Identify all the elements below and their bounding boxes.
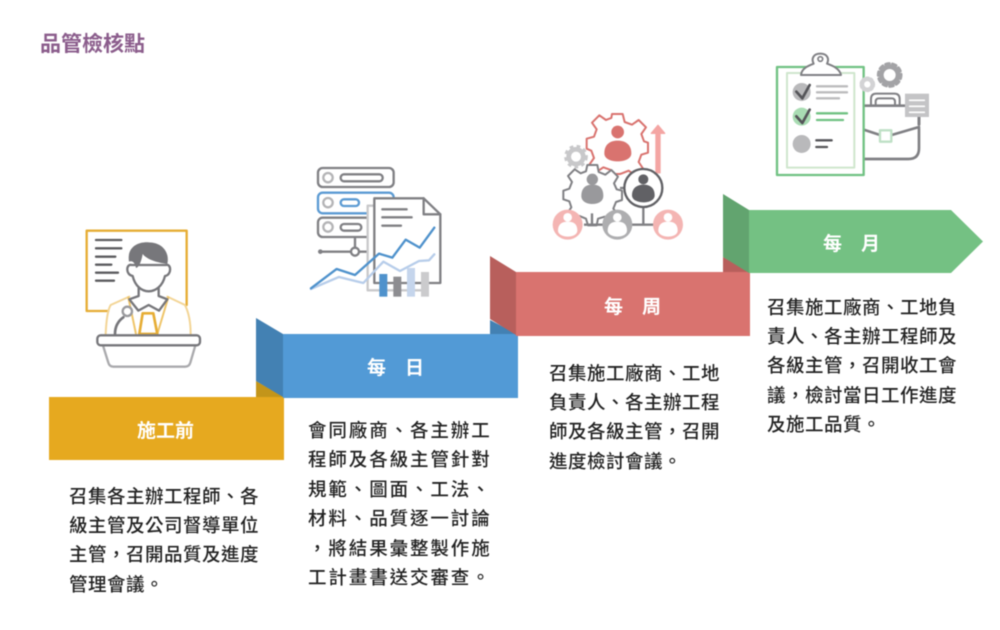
text: 每日 description	[308, 420, 492, 588]
text: 每月 description: 及施工品質。	[767, 414, 881, 435]
text: 每周 description: 師及各級主管，召開	[549, 421, 720, 442]
text: 每日 description: ，將結果彙整製作施	[308, 538, 492, 559]
label: 施工前: 施工前	[137, 421, 194, 442]
ribbon: 施工前	[49, 381, 284, 460]
text: 每月 description: 各級主管，召開收工會	[767, 355, 957, 376]
text: 每周 description: 召集施工廠商、工地	[549, 363, 720, 384]
text: 每日 description: 材料、品質逐一討論	[308, 508, 492, 529]
text: 每日 description: 程師及各級主管針對	[308, 449, 492, 470]
text: 施工前 description	[69, 486, 259, 595]
text: 每日 description: 會同廠商、各主辦工	[308, 420, 492, 441]
text: 每月 description: 責人、各主辦工程師及	[767, 326, 957, 347]
text: 每周 description: 進度檢討會議。	[549, 451, 682, 472]
ribbon: 每月	[723, 194, 983, 273]
text: 每月 description: 議，檢討當日工作進度	[767, 385, 957, 406]
text: 每日 description: 規範、圖面、工法、	[308, 479, 492, 500]
text: 施工前 description: 管理會議。	[69, 574, 164, 595]
text: 施工前 description: 級主管及公司督導單位	[69, 515, 259, 536]
label: 每月: 每 月	[823, 234, 880, 255]
ribbon: 每周	[490, 256, 750, 336]
icon: presenter at podium	[87, 231, 200, 367]
text: 每周 description	[549, 363, 720, 472]
text: 施工前 description: 主管，召開品質及進度	[69, 544, 259, 565]
title: 品管檢核點	[40, 33, 145, 56]
text: 每月 description	[766, 297, 957, 435]
ribbon: 每日	[256, 318, 518, 398]
text: 施工前 description: 召集各主辦工程師、各	[69, 486, 259, 507]
text: 每日 description: 工計畫書送交審查。	[308, 567, 492, 588]
text: 每周 description: 負責人、各主辦工程	[549, 392, 720, 413]
icon: team gears	[553, 114, 683, 240]
text: 每月 description: 召集施工廠商、工地負	[767, 297, 957, 318]
label: 每周: 每 周	[604, 297, 661, 318]
label: 每日: 每 日	[367, 358, 424, 379]
icon: checklist and briefcase	[777, 54, 929, 175]
icon: servers, document and charts	[311, 168, 440, 297]
